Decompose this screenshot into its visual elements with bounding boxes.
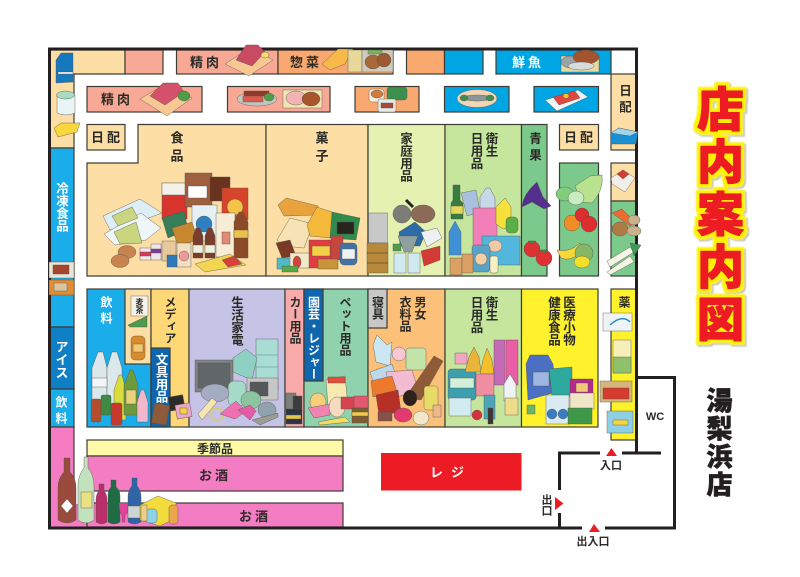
labels: vertical section names: 飲料 — [54, 395, 68, 428]
labels: vertical section names: 家庭用品 — [398, 131, 412, 182]
illustration: root vegetables — [607, 209, 641, 275]
store walls — [50, 49, 674, 528]
illustration: liquor bottles — [58, 457, 178, 526]
illustration: home appliances — [195, 339, 278, 425]
panel: lower aisle block — [87, 289, 598, 427]
labels: vertical section names: 菓子 — [314, 130, 328, 167]
labels: horizontal section names: 精肉 — [190, 55, 222, 70]
labels: vertical section names: 冷凍食品 — [54, 181, 68, 232]
panel: register — [381, 453, 522, 490]
illustration: sweets pile — [276, 198, 360, 272]
illustration: eggplant — [522, 182, 551, 209]
icon: fish platter — [457, 90, 497, 108]
icon: blue cooler box — [611, 128, 638, 144]
illustration: medical goods — [526, 355, 594, 424]
icon: sashimi tray — [545, 90, 588, 111]
labels: horizontal section names: 日配 — [91, 130, 123, 145]
icon: meat tray top — [225, 45, 273, 76]
labels: horizontal section names: お酒 — [199, 468, 231, 483]
labels: horizontal section names: 季節品 — [197, 441, 233, 456]
icon: car goods — [286, 393, 302, 424]
labels: horizontal section names — [91, 55, 664, 548]
icon: barley tea card and jar — [128, 296, 148, 360]
labels: horizontal section names: 入口 — [600, 459, 622, 472]
labels: vertical section names: 日配 — [617, 84, 631, 117]
labels: vertical section names: 薬 — [617, 295, 631, 309]
illustration: hygiene goods lower — [448, 340, 518, 424]
labels: horizontal section names: お酒 — [239, 509, 271, 524]
illustration: clothing — [370, 335, 443, 425]
illustration: pet goods — [308, 376, 368, 425]
illustration: hygiene goods upper — [449, 185, 520, 275]
labels: vertical section names — [54, 84, 631, 516]
labels: vertical section names: 衛生 — [484, 295, 498, 321]
labels: horizontal section names: 日配 — [564, 130, 596, 145]
arrow: entrance — [606, 448, 617, 456]
labels: vertical section names: アイス — [54, 340, 68, 379]
labels: vertical section names: 青果 — [527, 131, 541, 165]
labels: vertical section names: 出口 — [540, 494, 552, 516]
icon: meat plates — [237, 90, 322, 108]
labels: vertical section names: 麦茶 — [135, 297, 144, 315]
labels: vertical section names: 園芸・レジャー — [306, 296, 320, 380]
arrow: main entrance — [589, 524, 600, 532]
heading: store name: 湯梨浜店 — [703, 387, 733, 499]
labels: horizontal section names: 惣菜 — [290, 55, 322, 70]
labels: vertical section names: ペット用品 — [338, 296, 352, 357]
labels: horizontal section names: レジ — [430, 465, 472, 480]
labels: horizontal section names: 出入口 — [576, 535, 610, 548]
panel: right column shelves — [611, 74, 636, 440]
illustration: vegetables and fruit — [556, 175, 602, 268]
panel: top wall shelves — [50, 50, 611, 148]
icon: frozen food packs — [49, 262, 74, 295]
labels: vertical section names: 衛生 — [484, 131, 498, 157]
labels: vertical section names: カー用品 — [288, 296, 302, 345]
icon: deli top — [322, 49, 393, 72]
icon: fresh fish top — [561, 50, 599, 72]
icon: medicine boxes — [600, 313, 633, 433]
panel: left column freezers — [50, 148, 110, 528]
labels: vertical section names: 飲料 — [99, 295, 113, 328]
panel: food and sweets block — [87, 124, 598, 276]
labels: vertical section names: 健康食品 — [546, 295, 560, 346]
labels: vertical section names: 衣料品 — [398, 295, 412, 333]
illustration: drinks — [91, 352, 148, 425]
labels: horizontal section names: 鮮魚 — [512, 55, 544, 70]
panel: seasonal and liquor shelves — [87, 440, 343, 527]
panel: second row shelves — [87, 86, 598, 112]
labels: vertical section names: 寝具 — [370, 295, 384, 321]
labels: horizontal section names: WC — [646, 411, 664, 423]
labels: vertical section names: 生活家電 — [229, 295, 243, 346]
labels: horizontal section names: 精肉 — [101, 92, 133, 107]
labels: vertical section names: 医療小物 — [561, 296, 575, 346]
icon: deli plates — [369, 87, 407, 112]
labels: vertical section names: 文具用品 — [154, 352, 168, 404]
heading: map title: 店内案内図 — [690, 85, 744, 348]
labels: vertical section names: 食品 — [168, 130, 184, 167]
illustration: household goods — [367, 200, 442, 273]
icon: stationery — [151, 395, 192, 425]
icon: meat tray row two — [140, 83, 192, 116]
illustration: tomatoes — [524, 241, 552, 266]
labels: vertical section names: 日用品 — [468, 132, 483, 170]
labels: vertical section names: 日用品 — [468, 296, 483, 334]
labels: vertical section names: メディア — [163, 296, 177, 344]
arrow: exit — [555, 497, 564, 510]
icon: calendar box — [611, 170, 635, 192]
labels: vertical section names: 男女 — [413, 296, 427, 321]
icon: dairy goods — [54, 53, 80, 137]
illustration: grocery pile — [103, 173, 248, 272]
